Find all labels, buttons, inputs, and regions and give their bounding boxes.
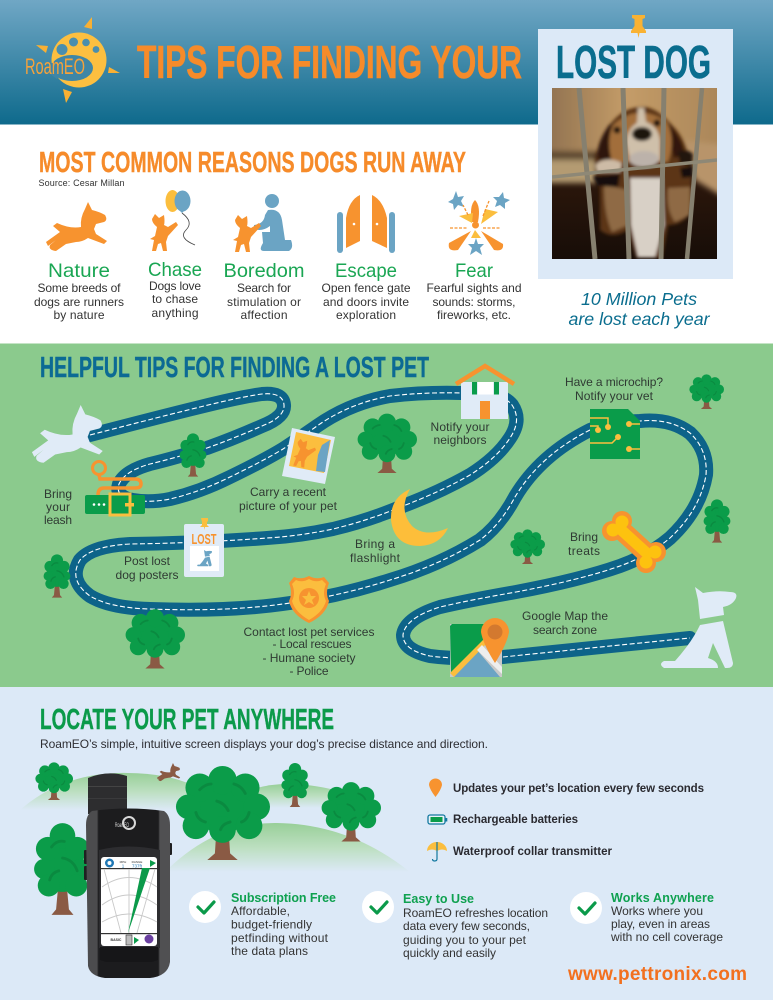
logo: RoamEO: RoamEO: [25, 54, 85, 79]
icon: tree c: [176, 766, 270, 860]
labels: road tips: treats: [568, 544, 600, 558]
icon: tree d: [281, 763, 309, 807]
label: escape: Escape: [335, 260, 397, 282]
icon: tree e: [322, 782, 381, 842]
description: nature: dogs are runners: [34, 295, 124, 309]
text: works anywhere: [610, 904, 723, 944]
labels: road tips: Contact lost pet services: [244, 625, 374, 639]
icon: tree 4: [358, 414, 417, 473]
icon: map with pin: [450, 618, 509, 677]
device screen: RANGE: [132, 860, 142, 864]
labels: road tips: leash: [44, 513, 72, 527]
icon: sitting white dog: [661, 587, 736, 668]
icon: tree 5: [689, 374, 724, 409]
device screen: MPH: [120, 860, 126, 864]
labels: road tips: dog posters: [116, 568, 178, 582]
icon: tree 2: [44, 554, 70, 598]
reason: escape: [322, 195, 411, 322]
icon: location pin: [429, 778, 442, 797]
description: fear: sounds: storms,: [432, 295, 516, 309]
device screen: BASIC: [111, 938, 122, 942]
description: boredom: affection: [240, 308, 288, 322]
description: escape: exploration: [336, 308, 396, 322]
callout: 10 million pets: [568, 289, 711, 329]
title: TIPS FOR FINDING YOUR: [137, 36, 522, 88]
icon: person petting dog: [233, 194, 292, 252]
icon: tree b: [34, 823, 91, 915]
description: nature: [34, 281, 124, 322]
description: chase: to chase: [152, 292, 198, 306]
device screen: [101, 857, 157, 946]
icon: police badge: [289, 576, 329, 623]
icon: check: [362, 891, 394, 923]
description: boredom: Search for: [237, 281, 291, 295]
description: fear: [426, 281, 522, 322]
labels: road tips: - Local rescues: [272, 637, 352, 651]
label: chase: Chase: [148, 259, 202, 281]
description: fear: Fearful sights and: [426, 281, 522, 295]
text: works anywhere: play, even in areas: [611, 917, 710, 931]
source note: Source: Cesar Millan: [38, 178, 124, 188]
label: fear: Fear: [455, 260, 493, 282]
text: easy to use: [403, 906, 548, 960]
text: works anywhere: Works where you: [611, 904, 703, 918]
icon: dog and balloon: [150, 190, 195, 251]
labels: road tips: Notify your: [430, 420, 490, 434]
text: easy to use: data every few seconds,: [403, 919, 530, 933]
icon: open gate: [337, 195, 395, 253]
description: chase: Dogs love: [149, 279, 201, 293]
photo: beagle behind bars: [552, 88, 717, 259]
icon: battery: [428, 815, 447, 824]
panel: locate your pet: [0, 687, 773, 1000]
icon: house: [456, 366, 514, 419]
panel: helpful tips: [0, 344, 773, 687]
callout: 10 million pets: are lost each year: [568, 309, 711, 329]
text: easy to use: quickly and easily: [403, 946, 496, 960]
heading: works anywhere: Works Anywhere: [611, 891, 714, 905]
description: escape: [322, 281, 411, 322]
device screen: 737ft: [132, 864, 143, 868]
panel: lost dog card: [538, 15, 733, 279]
icon: dog bone treat: [602, 511, 666, 573]
labels: road tips: picture of your pet: [239, 499, 338, 513]
labels: road tips: [44, 375, 663, 678]
labels: road tips: Post lost: [124, 554, 171, 568]
description: escape: and doors invite: [323, 295, 409, 309]
icon: fireworks: [448, 191, 510, 255]
icon: lost poster: [184, 518, 224, 577]
icon: tree 7: [510, 529, 545, 564]
benefit: easy to use: [362, 891, 548, 960]
description: boredom: stimulation or: [227, 295, 301, 309]
text: subscription free: budget-friendly: [231, 918, 312, 932]
labels: road tips: Have a microchip?: [565, 375, 663, 389]
benefit: works anywhere: [570, 891, 723, 944]
text: subscription free: petfinding without: [231, 931, 329, 945]
device screen: 1: [122, 864, 125, 868]
heading: helpful tips: HELPFUL TIPS FOR FINDING A LOST PET: [40, 352, 429, 384]
feature: location updates: Updates your pet’s location every few seconds: [453, 783, 704, 795]
text: easy to use: guiding you to your pet: [403, 933, 527, 947]
icon: running white dog: [32, 405, 103, 463]
labels: road tips: neighbors: [434, 433, 486, 447]
text: works anywhere: with no cell coverage: [610, 930, 723, 944]
reason: chase: [148, 190, 202, 320]
icon: umbrella: [427, 842, 447, 861]
description: escape: Open fence gate: [322, 281, 411, 295]
icon: tree a: [35, 762, 73, 800]
benefit: subscription free: [189, 891, 336, 958]
device logo: RoamEO: [115, 823, 129, 829]
icon: tree 3: [126, 609, 185, 668]
feature: waterproof: Waterproof collar transmitter: [453, 846, 613, 858]
description: boredom: [227, 281, 301, 322]
reason: fear: [426, 191, 522, 322]
logo: RoamEO: [25, 17, 120, 103]
icon: leash and collar: [85, 462, 145, 515]
labels: road tips: flashlight: [350, 551, 401, 565]
reason: boredom: [224, 194, 304, 322]
icon: small running brown dog: [157, 763, 180, 781]
labels: road tips: - Humane society: [262, 651, 356, 665]
labels: road tips: Bring: [44, 487, 72, 501]
heading: locate your pet: LOCATE YOUR PET ANYWHERE: [40, 704, 334, 736]
labels: road tips: Google Map the: [522, 609, 608, 623]
labels: road tips: your: [46, 500, 70, 514]
label: nature: Nature: [48, 260, 110, 282]
device: RoamEO handheld: [84, 773, 172, 978]
label: boredom: Boredom: [224, 260, 304, 282]
text: subscription free: [231, 904, 329, 958]
icon: yellow push pin: [631, 15, 646, 38]
icon: running dog: [46, 202, 107, 251]
feature: batteries: Rechargeable batteries: [453, 814, 578, 826]
callout: 10 million pets: 10 Million Pets: [581, 289, 697, 309]
heading: reasons dogs run away: MOST COMMON REASONS DOGS RUN AWAY: [39, 147, 466, 179]
labels: road tips: Notify your vet: [575, 389, 654, 403]
icon: check: [189, 891, 221, 923]
labels: road tips: - Police: [290, 664, 329, 678]
description: fear: fireworks, etc.: [437, 308, 511, 322]
labels: road tips: search zone: [533, 623, 597, 637]
heading: easy to use: Easy to Use: [403, 892, 474, 906]
icon: polaroid picture: [282, 428, 335, 484]
labels: road tips: Carry a recent: [250, 485, 327, 499]
website url: www.pettronix.com: [567, 964, 747, 985]
device logo: [115, 817, 135, 829]
winding road: [76, 392, 706, 658]
icon: check: [570, 892, 602, 924]
labels: road tips: Bring: [570, 530, 598, 544]
icon: tree 6: [704, 499, 730, 543]
description: chase: [149, 279, 201, 320]
icon: lost poster: LOST: [192, 531, 216, 548]
description: nature: by nature: [54, 308, 105, 322]
text: subscription free: Affordable,: [231, 904, 290, 918]
reason: nature: [34, 202, 124, 322]
heading: subscription free: Subscription Free: [231, 891, 336, 905]
subtitle: RoamEO’s simple, intuitive screen displays your dog’s precise distance and direction.: [40, 737, 488, 751]
icon: tree 1: [180, 433, 206, 477]
text: subscription free: the data plans: [231, 944, 308, 958]
header band: [0, 0, 773, 124]
description: nature: Some breeds of: [38, 281, 121, 295]
labels: road tips: Bring a: [355, 537, 395, 551]
hills: [20, 773, 410, 872]
description: chase: anything: [152, 306, 198, 320]
icon: microchip: [590, 409, 640, 459]
icon: crescent moon flashlight: [391, 489, 448, 546]
text: easy to use: RoamEO refreshes location: [403, 906, 548, 920]
